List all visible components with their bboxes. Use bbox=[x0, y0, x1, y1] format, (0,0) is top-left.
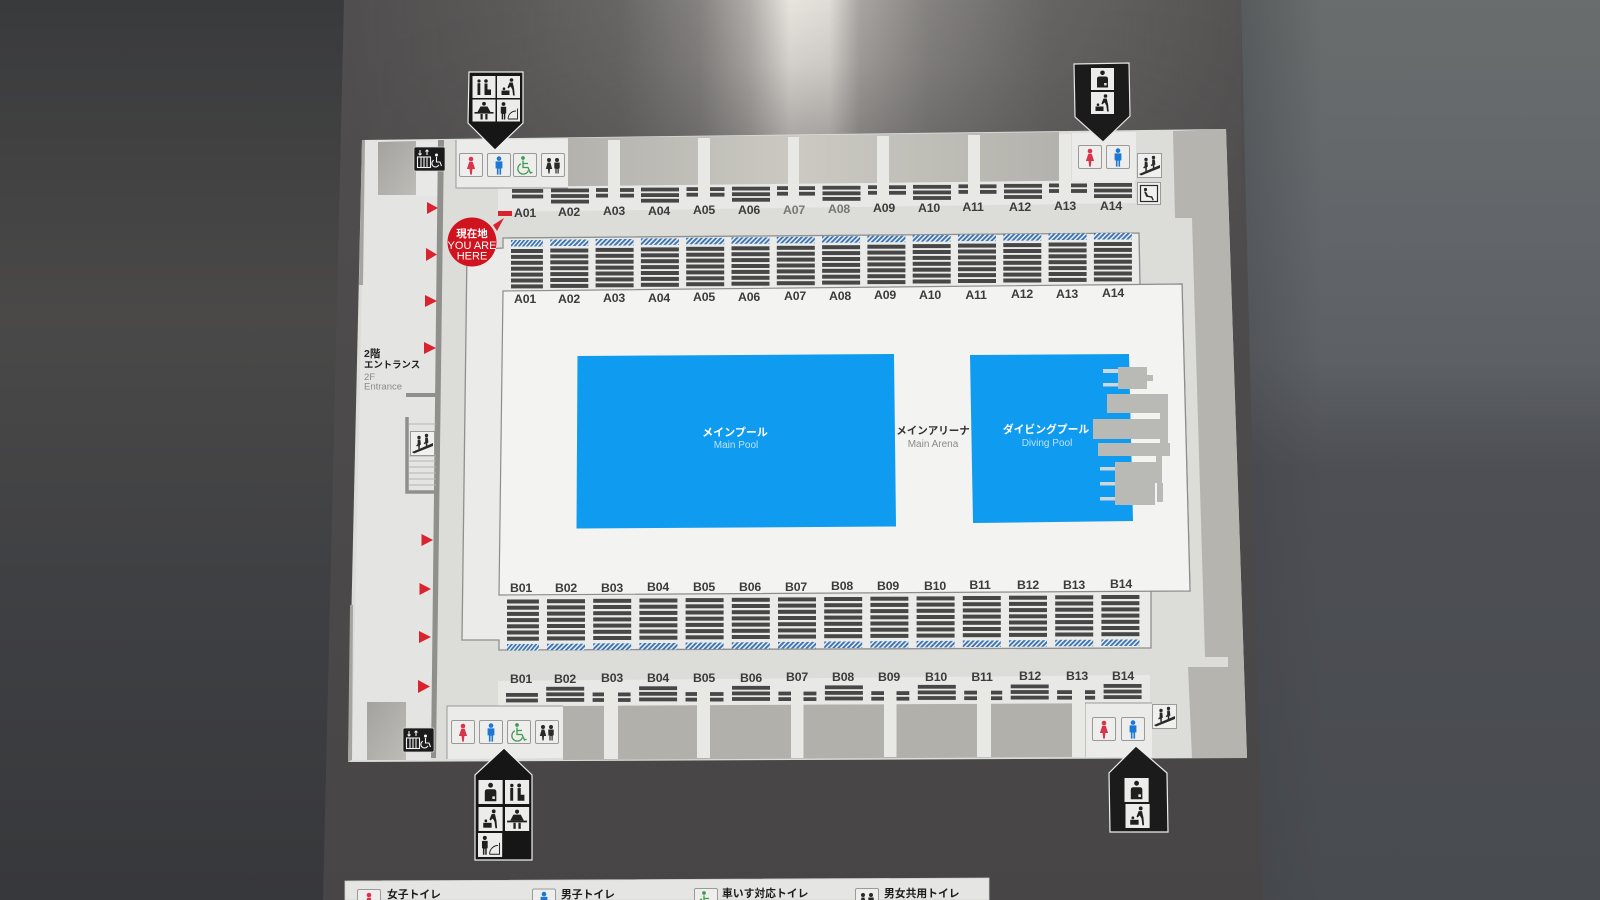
toilet icons bottom left bbox=[452, 720, 558, 744]
inner B labels bbox=[510, 577, 1132, 595]
main arena label: メインアリーナ bbox=[896, 425, 970, 437]
outer A labels: A03 bbox=[603, 204, 625, 218]
inner B labels: B03 bbox=[601, 581, 623, 595]
stairs in entrance corridor bbox=[406, 393, 438, 492]
outer B labels: B09 bbox=[878, 670, 900, 684]
lift icon bottom left bbox=[403, 728, 434, 752]
main arena label bbox=[896, 425, 970, 450]
outer A labels: A14 bbox=[1100, 199, 1122, 213]
main arena label: Main Arena bbox=[908, 439, 959, 450]
legend: 男女共用トイレ bbox=[884, 886, 960, 900]
stairs and seat icons top right bbox=[1138, 154, 1162, 204]
2F entrance label: Entrance bbox=[364, 382, 402, 392]
outer B labels: B11 bbox=[971, 670, 993, 684]
lift landing top bbox=[416, 142, 439, 196]
inner B labels: B04 bbox=[647, 580, 669, 594]
inner A labels: A11 bbox=[965, 288, 987, 302]
outer A labels: A01 bbox=[514, 206, 536, 220]
inner B labels: B05 bbox=[693, 580, 715, 594]
diving platforms bbox=[1093, 367, 1170, 505]
stairs icon bottom right bbox=[1152, 704, 1176, 728]
inner B labels: B08 bbox=[831, 579, 853, 593]
inner A labels: A04 bbox=[648, 291, 670, 305]
outer A labels bbox=[514, 199, 1122, 220]
outer A labels: A07 bbox=[783, 203, 805, 217]
main pool: メインプール bbox=[702, 426, 768, 439]
outer B labels: B02 bbox=[554, 672, 576, 686]
inner seating A bbox=[511, 233, 1132, 306]
outer B labels: B14 bbox=[1112, 669, 1134, 683]
toilet box bottom right bbox=[1085, 703, 1152, 757]
toilet icons top right bbox=[1078, 146, 1130, 168]
outer B labels: B08 bbox=[832, 670, 854, 684]
outer B labels: B03 bbox=[601, 671, 623, 685]
inner A labels bbox=[514, 286, 1124, 306]
inner A labels: A14 bbox=[1102, 286, 1124, 300]
outer B labels: B07 bbox=[786, 670, 808, 684]
toilet icons top left bbox=[460, 154, 564, 176]
outer A labels: A08 bbox=[828, 202, 850, 216]
outer B labels: B13 bbox=[1066, 669, 1088, 683]
inner seating B bbox=[507, 577, 1139, 650]
facility sign top left bbox=[468, 72, 523, 150]
legend: 車いす対応トイレ bbox=[722, 886, 809, 900]
outer seating A bbox=[512, 134, 1132, 220]
diving pool: ダイビングプール bbox=[1003, 422, 1089, 436]
facility sign bottom right bbox=[1109, 746, 1168, 832]
outer B labels: B04 bbox=[647, 671, 669, 685]
main pool bbox=[576, 354, 896, 528]
inner A labels: A09 bbox=[874, 288, 896, 302]
inner B labels: B01 bbox=[510, 581, 532, 595]
outer B labels: B01 bbox=[510, 672, 532, 686]
toilet box bottom left bbox=[447, 706, 563, 759]
entrance direction arrows bbox=[418, 202, 438, 693]
you are here marker bbox=[448, 211, 512, 266]
you are here marker: YOU ARE bbox=[448, 240, 496, 252]
inner B labels: B10 bbox=[924, 579, 946, 593]
outer B labels: B06 bbox=[740, 671, 762, 685]
inner A labels: A01 bbox=[514, 292, 536, 306]
outer A labels: A11 bbox=[962, 200, 984, 214]
you are here marker: HERE bbox=[457, 250, 487, 262]
outer A labels: A12 bbox=[1009, 200, 1031, 214]
outer seating strip top bbox=[498, 180, 1136, 212]
legend bbox=[345, 878, 989, 900]
outer A labels: A09 bbox=[873, 201, 895, 215]
main pool: Main Pool bbox=[714, 440, 758, 451]
facility sign bottom left bbox=[475, 748, 532, 860]
arena bbox=[499, 284, 1190, 595]
inner B labels: B02 bbox=[555, 581, 577, 595]
diving pool: Diving Pool bbox=[1022, 438, 1072, 449]
left sheet edge upper bbox=[359, 140, 365, 285]
inner B labels: B09 bbox=[877, 579, 899, 593]
2F entrance label: エントランス bbox=[364, 359, 420, 370]
outer seating B bbox=[506, 669, 1142, 759]
outer A labels: A06 bbox=[738, 203, 760, 217]
outer A labels: A04 bbox=[648, 204, 670, 218]
inner A labels: A03 bbox=[603, 291, 625, 305]
you are here marker: 現在地 bbox=[456, 227, 488, 240]
outer A labels: A02 bbox=[558, 205, 580, 219]
outer B labels: B10 bbox=[925, 670, 947, 684]
inner A labels: A05 bbox=[693, 290, 715, 304]
diving pool bbox=[970, 354, 1170, 523]
inner A labels: A12 bbox=[1011, 287, 1033, 301]
inner A labels: A06 bbox=[738, 290, 760, 304]
toilet box top left bbox=[456, 139, 568, 188]
lift icon top left bbox=[414, 147, 445, 171]
inner B labels: B11 bbox=[969, 578, 991, 592]
outer B labels: B05 bbox=[693, 671, 715, 685]
inner B labels: B07 bbox=[785, 580, 807, 594]
corridor wall bbox=[431, 140, 444, 758]
facility sign top right bbox=[1074, 63, 1130, 142]
outer B labels bbox=[510, 669, 1134, 686]
inner A labels: A08 bbox=[829, 289, 851, 303]
gray right margin bbox=[1173, 129, 1247, 758]
gray block top left bbox=[378, 141, 416, 195]
inner B labels: B12 bbox=[1017, 578, 1039, 592]
inner B labels: B14 bbox=[1110, 577, 1132, 591]
2F entrance label bbox=[364, 347, 420, 392]
top pillars bbox=[608, 134, 1071, 205]
inner A labels: A10 bbox=[919, 288, 941, 302]
gray band bottom bbox=[563, 703, 1085, 760]
floor map sheet bbox=[348, 129, 1247, 762]
left corridor floor bbox=[352, 140, 438, 760]
outer seating strip bottom bbox=[498, 675, 1150, 706]
outer A labels: A05 bbox=[693, 203, 715, 217]
inner A labels: A13 bbox=[1056, 287, 1078, 301]
left sheet edge lower bbox=[348, 605, 353, 762]
inner B labels: B13 bbox=[1063, 578, 1085, 592]
gray block bottom left bbox=[367, 702, 406, 760]
outer A labels: A13 bbox=[1054, 199, 1076, 213]
toilet icons bottom right bbox=[1092, 718, 1144, 740]
2F entrance label: 2F bbox=[364, 372, 375, 383]
2F entrance label: 2階 bbox=[364, 347, 381, 360]
inner A labels: A07 bbox=[784, 289, 806, 303]
inner A labels: A02 bbox=[558, 292, 580, 306]
outer A labels: A10 bbox=[918, 201, 940, 215]
main hall floor bbox=[462, 233, 1190, 650]
inner B labels: B06 bbox=[739, 580, 761, 594]
toilet box top right bbox=[1072, 132, 1136, 181]
bottom pillars bbox=[604, 682, 1085, 759]
outer B labels: B12 bbox=[1019, 669, 1041, 683]
gray band top bbox=[568, 132, 1060, 187]
